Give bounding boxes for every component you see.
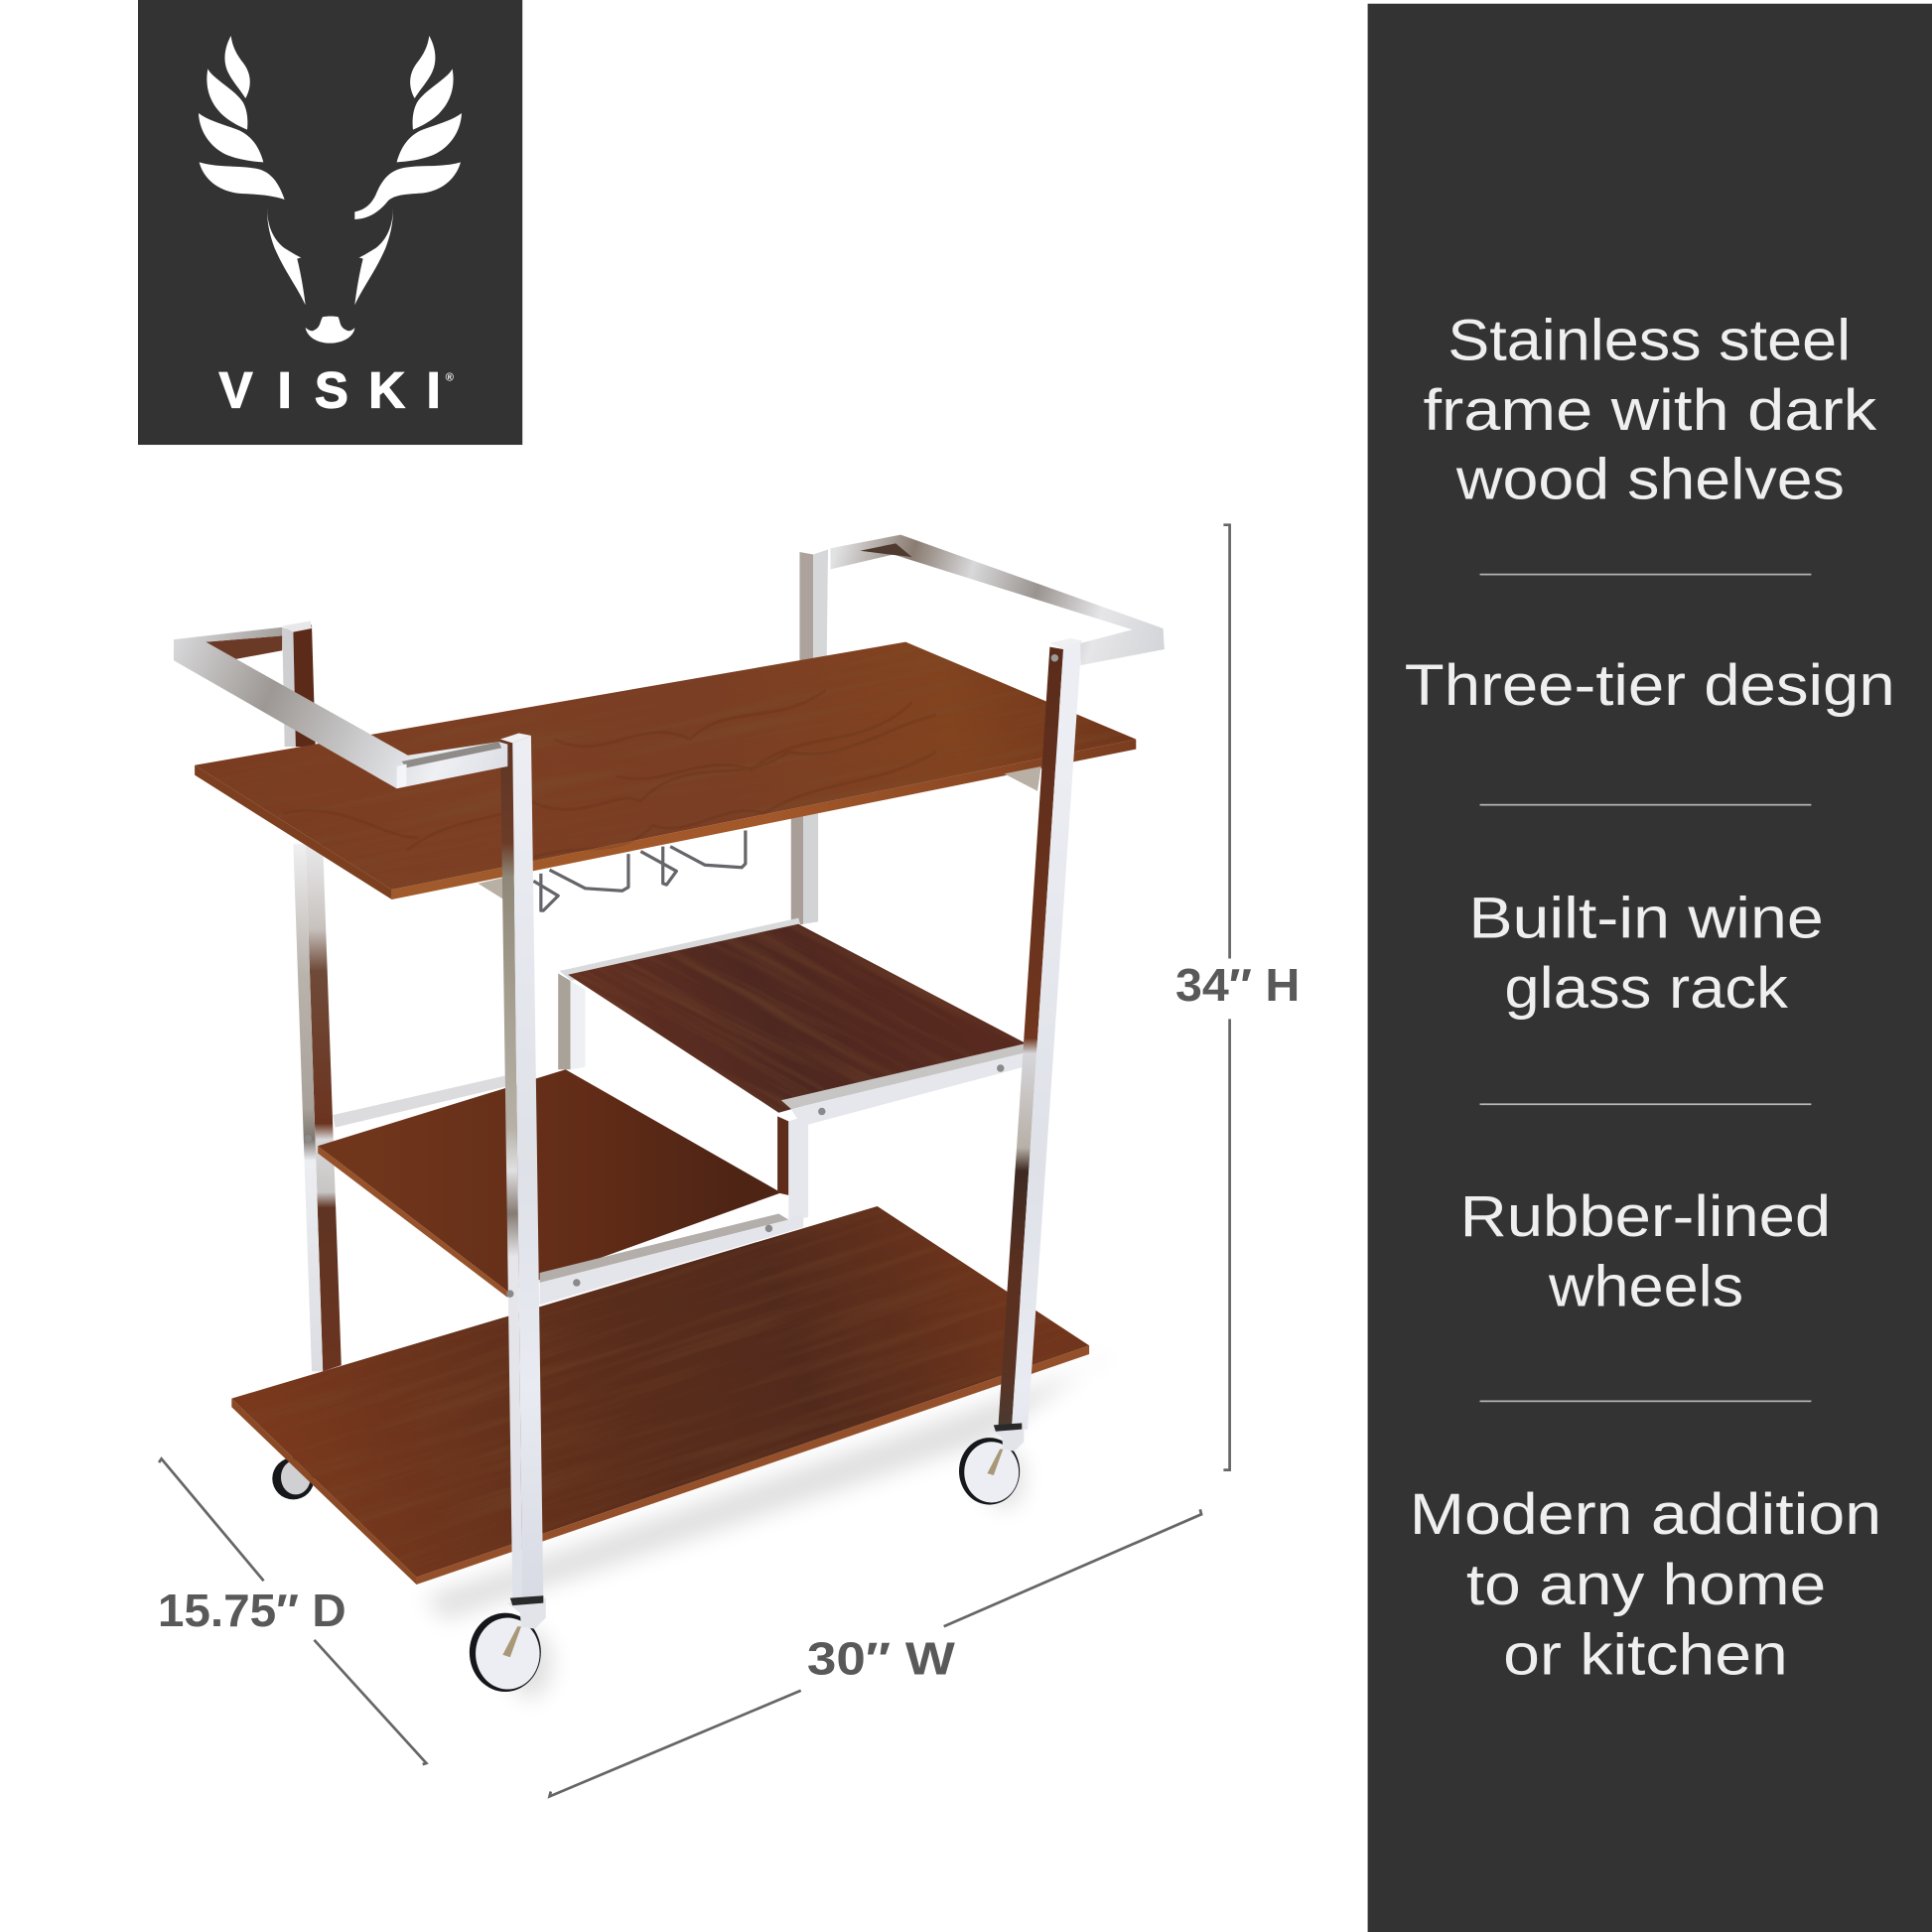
logo wordmark: I <box>278 362 292 419</box>
front left post <box>305 733 543 1601</box>
deer logo mark <box>199 36 462 344</box>
feature: frame: wood shelves <box>1455 448 1845 512</box>
middle left shelf <box>318 1069 781 1298</box>
dimension: height <box>1175 525 1300 1470</box>
feature: wine rack <box>1468 886 1824 1021</box>
under-shelf brackets <box>479 766 1041 901</box>
wine glass rack <box>533 830 746 910</box>
dimension: depth <box>158 1458 426 1764</box>
bottom shelf <box>231 1206 1090 1585</box>
right front wheel <box>959 1423 1024 1505</box>
feature: wheels: Rubber-lined <box>1460 1184 1831 1249</box>
bar cart illustration <box>174 534 1165 1701</box>
feature: frame <box>1423 308 1877 512</box>
step frame <box>540 1042 1033 1305</box>
upper frame of middle tier <box>558 918 801 1069</box>
middle right shelf <box>568 923 1024 1113</box>
feature: modern: Modern addition <box>1410 1482 1881 1547</box>
right back post upper <box>799 550 828 661</box>
floor shadows <box>425 1349 1115 1698</box>
front left wheel <box>470 1595 546 1692</box>
feature: modern: or kitchen <box>1503 1623 1788 1688</box>
lower left frame bar <box>333 1075 505 1128</box>
feature: wine rack: glass rack <box>1504 956 1789 1021</box>
feature: frame: frame with dark <box>1423 378 1877 443</box>
logo wordmark: S <box>315 362 348 419</box>
back wheel <box>272 1457 314 1499</box>
right front post <box>998 638 1082 1430</box>
dimension: depth: 15.75″ D <box>158 1585 346 1636</box>
logo wordmark: ® <box>446 371 455 383</box>
right feature panel <box>1368 4 1932 1932</box>
back right post lower <box>791 813 818 926</box>
feature: wheels: wheels <box>1548 1255 1743 1319</box>
logo wordmark: V <box>219 362 253 419</box>
left handle <box>174 627 507 788</box>
logo wordmark <box>219 362 455 419</box>
feature: wheels <box>1460 1184 1831 1319</box>
feature: modern: to any home <box>1466 1553 1826 1617</box>
dimension: width: 30″ W <box>807 1633 956 1685</box>
dimension: height: 34″ H <box>1175 959 1300 1011</box>
top shelf <box>195 641 1136 899</box>
feature: tiers: Three-tier design <box>1405 653 1895 718</box>
left back post upper <box>282 621 316 747</box>
feature: frame: Stainless steel <box>1448 308 1851 372</box>
feature: modern <box>1410 1482 1881 1688</box>
logo wordmark: I <box>427 362 441 419</box>
logo wordmark: K <box>368 362 405 419</box>
dimension: width <box>550 1509 1201 1796</box>
back left post lower <box>293 844 342 1371</box>
right handle <box>830 535 1165 665</box>
logo panel <box>138 0 522 445</box>
feature: wine rack: Built-in wine <box>1468 886 1824 950</box>
